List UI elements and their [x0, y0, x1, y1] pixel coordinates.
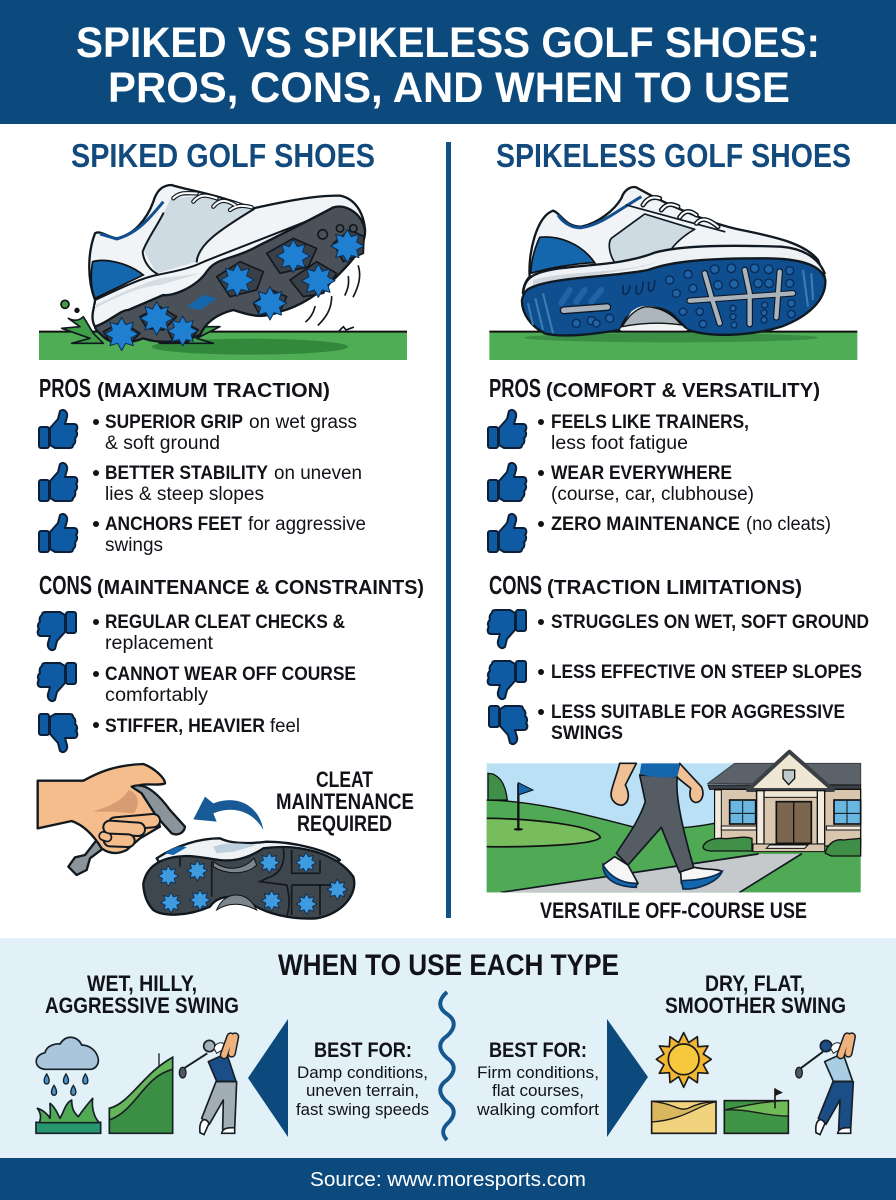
pro: better stability — [93, 463, 362, 505]
con: cleat checks: replacement — [105, 633, 214, 654]
icon: thumbs down — [488, 610, 526, 648]
pro: anchors feet — [93, 514, 366, 556]
text: best for spiked: fast swing speeds — [296, 1100, 429, 1119]
label: dry flat smoother — [665, 971, 846, 1018]
con: wet ground: STRUGGLES ON WET, SOFT GROUND — [551, 612, 869, 633]
icon: thumbs down — [38, 612, 76, 650]
text: best for spiked — [296, 1039, 429, 1119]
pro: feels like trainers: less foot fatigue — [551, 433, 688, 454]
header band — [0, 0, 896, 124]
con: aggressive swings — [538, 702, 845, 744]
heading: spiked: SPIKED GOLF SHOES — [71, 137, 375, 174]
pros heading: spikeless: PROS — [489, 373, 541, 403]
icon: thumbs up — [39, 410, 77, 448]
pro: wear everywhere: (course, car, clubhouse) — [551, 484, 754, 505]
pro: zero maintenance: (no cleats) — [746, 514, 831, 535]
pro: superior grip: & soft ground — [105, 433, 220, 454]
con: aggressive swings: SWINGS — [551, 723, 623, 744]
pro: better stability: on uneven — [274, 463, 362, 484]
pros heading: spikeless: (COMFORT & VERSATILITY) — [546, 380, 820, 402]
con: aggressive swings: LESS SUITABLE FOR AGGRESSIVE — [551, 702, 845, 723]
pro: better stability: lies & steep slopes — [105, 484, 264, 505]
caption: versatile off-course use: VERSATILE OFF-COURSE USE — [540, 898, 807, 923]
text: best for spiked: uneven terrain, — [306, 1081, 419, 1100]
icon: hill slope — [109, 1053, 173, 1133]
pro: zero maintenance — [538, 514, 831, 535]
text: best for spikeless: Firm conditions, — [477, 1063, 599, 1082]
title: PROS, CONS, AND WHEN TO USE — [108, 64, 790, 112]
caption: cleat maintenance required: REQUIRED — [297, 811, 392, 836]
panel: when to use each type — [0, 938, 896, 1158]
title — [76, 19, 820, 112]
icon: thumbs up — [39, 514, 77, 552]
icon: thumbs down — [488, 661, 526, 699]
title: SPIKED VS SPIKELESS GOLF SHOES: — [76, 19, 820, 67]
text: best for spikeless — [476, 1039, 599, 1119]
pro: feels like trainers — [538, 412, 749, 454]
footer band — [0, 1158, 896, 1200]
pro: anchors feet: ANCHORS FEET — [105, 514, 242, 535]
label: wet hilly aggressive: AGGRESSIVE SWING — [45, 993, 239, 1018]
icon: thumbs up — [488, 410, 526, 448]
pro: superior grip: on wet grass — [249, 412, 357, 433]
illustration: spikeless shoe on grass — [489, 187, 857, 360]
con: stiffer: STIFFER, HEAVIER — [105, 716, 265, 737]
pro: superior grip — [93, 412, 357, 454]
panel: spiked golf shoes — [38, 137, 424, 919]
source text: Source: www.moresports.com — [310, 1169, 586, 1191]
caption: cleat maintenance required: MAINTENANCE — [276, 789, 414, 814]
icon: thumbs up — [39, 463, 77, 501]
cons heading: spikeless: (TRACTION LIMITATIONS) — [547, 577, 802, 599]
illustration: cleat maintenance — [38, 764, 354, 919]
icon: thumbs up — [488, 463, 526, 501]
icon: golfer with blue shirt — [179, 1037, 237, 1135]
caption: cleat maintenance required: CLEAT — [316, 767, 373, 792]
cons heading: spiked: CONS — [39, 570, 92, 600]
cons heading: spiked — [39, 570, 424, 600]
icon: thumbs up — [488, 514, 526, 552]
text: best for spikeless: walking comfort — [476, 1100, 599, 1119]
panel: spikeless golf shoes — [481, 137, 869, 923]
icon: thumbs down — [38, 663, 76, 701]
pro: anchors feet: for aggressive — [248, 514, 366, 535]
cons heading: spiked: (MAINTENANCE & CONSTRAINTS) — [97, 577, 424, 599]
pro: superior grip: SUPERIOR GRIP — [105, 412, 243, 433]
pro: wear everywhere — [538, 463, 754, 505]
text: best for spikeless: flat courses, — [492, 1081, 584, 1100]
icon: golfer with light shirt — [796, 1037, 853, 1135]
icon: flat green with flag — [724, 1088, 788, 1133]
con: off course: comfortably — [105, 685, 209, 706]
illustration: walking off course to clubhouse — [481, 752, 865, 897]
label: dry flat smoother: DRY, FLAT, — [705, 971, 805, 996]
con: off course: CANNOT WEAR OFF COURSE — [105, 664, 356, 685]
pro: zero maintenance: ZERO MAINTENANCE — [551, 514, 740, 535]
pros heading: spiked: PROS — [39, 373, 91, 403]
heading: when to use: WHEN TO USE EACH TYPE — [278, 949, 619, 982]
text: best for spiked: BEST FOR: — [314, 1039, 412, 1062]
text: best for spikeless: BEST FOR: — [489, 1039, 587, 1062]
pro: better stability: BETTER STABILITY — [105, 463, 268, 484]
pro: wear everywhere: WEAR EVERYWHERE — [551, 463, 732, 484]
label: wet hilly aggressive — [45, 971, 239, 1018]
pros heading: spikeless — [489, 373, 820, 403]
arrow: toward spiked — [248, 1019, 288, 1137]
icon: rain cloud — [36, 1037, 98, 1095]
con: cleat checks — [93, 612, 345, 654]
label: wet hilly aggressive: WET, HILLY, — [87, 971, 197, 996]
pros heading: spiked — [39, 373, 330, 403]
cons heading: spikeless — [489, 570, 802, 600]
icon: wet grass — [36, 1098, 101, 1133]
con: stiffer: feel — [270, 716, 300, 737]
con: cleat checks: REGULAR CLEAT CHECKS & — [105, 612, 345, 633]
icon: dry ground — [652, 1101, 716, 1133]
text: best for spiked: Damp conditions, — [297, 1063, 428, 1082]
icon: sun — [656, 1033, 711, 1087]
con: steep slopes: LESS EFFECTIVE ON STEEP SLOPES — [551, 662, 862, 683]
wavy divider — [440, 992, 454, 1140]
pro: feels like trainers: FEELS LIKE TRAINERS, — [551, 412, 749, 433]
illustration: spiked shoe on grass — [39, 185, 407, 360]
caption: cleat maintenance required — [276, 767, 414, 836]
cons heading: spikeless: CONS — [489, 570, 542, 600]
pro: anchors feet: swings — [105, 535, 163, 556]
label: dry flat smoother: SMOOTHER SWING — [665, 993, 846, 1018]
arrow: toward spikeless — [607, 1019, 648, 1137]
icon: thumbs down — [39, 714, 77, 752]
heading: spikeless: SPIKELESS GOLF SHOES — [496, 137, 851, 174]
column divider — [446, 142, 451, 918]
con: off course — [93, 664, 356, 706]
pros heading: spiked: (MAXIMUM TRACTION) — [97, 380, 330, 402]
icon: thumbs down — [489, 706, 527, 744]
